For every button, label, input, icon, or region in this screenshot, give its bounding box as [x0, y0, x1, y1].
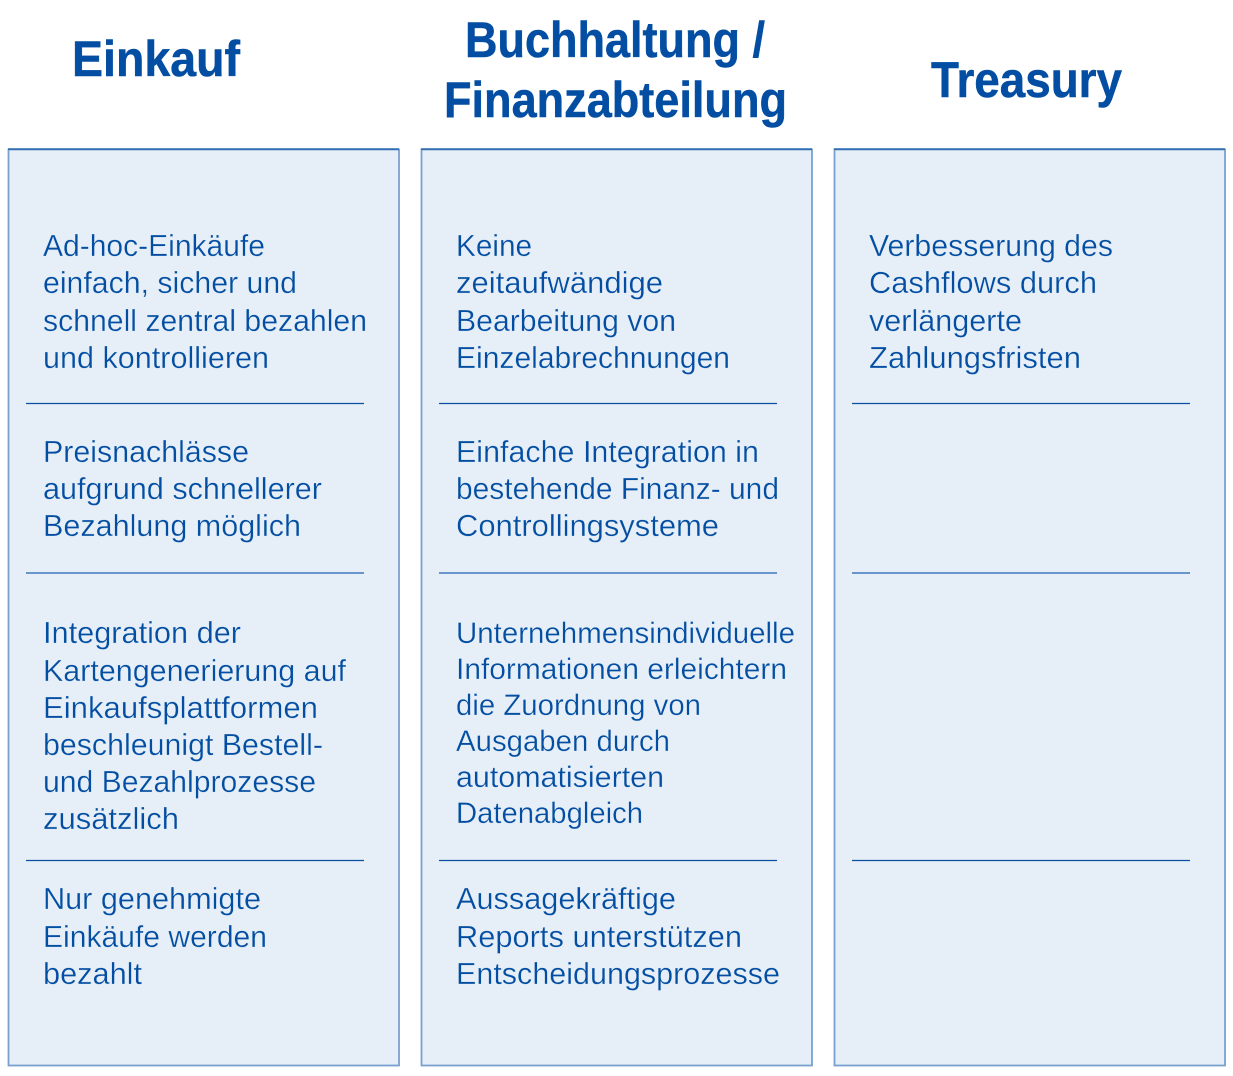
- text: Integration der Kartengenerierung: beschleunigt Bestell-: [43, 727, 323, 762]
- text: Preisnachlässe: aufgrund schnellerer: [43, 471, 322, 506]
- text: Ad-hoc-Einkäufe: und kontrollieren: [43, 340, 269, 375]
- text: Ad-hoc-Einkäufe: schnell zentral bezahlen: [43, 303, 367, 338]
- text: Aussagekräftige Reports: [456, 881, 780, 991]
- text: Keine zeitaufwändige Bearbeitung: [456, 228, 730, 375]
- text: Verbesserung des Cashflows: [869, 228, 1113, 375]
- text: Einfache Integration: Einfache Integration in: [456, 434, 759, 469]
- panel: Treasury: [834, 149, 1225, 1066]
- heading: Einkauf: Einkauf: [72, 31, 240, 87]
- text: Einfache Integration: Controllingsysteme: [456, 508, 719, 543]
- text: Preisnachlässe: [43, 434, 322, 543]
- text: Verbesserung des Cashflows: Cashflows durch: [869, 265, 1097, 300]
- heading: Buchhaltung / Finanzabteilung: Finanzabteilung: [444, 72, 787, 128]
- text: Verbesserung des Cashflows: Zahlungsfristen: [869, 340, 1081, 375]
- text: Integration der Kartengenerierung: und Bezahlprozesse: [43, 764, 316, 799]
- text: Aussagekräftige Reports: Aussagekräftige: [456, 881, 676, 916]
- text: Nur genehmigte Einkäufe: Einkäufe werden: [43, 919, 267, 954]
- text: Keine zeitaufwändige Bearbeitung: Bearbeitung von: [456, 303, 676, 338]
- heading: Buchhaltung / Finanzabteilung: [444, 12, 787, 128]
- text: Unternehmensindividuelle Informationen: die Zuordnung von: [456, 689, 701, 722]
- text: Verbesserung des Cashflows: Verbesserung des: [869, 228, 1113, 263]
- text: Nur genehmigte Einkäufe: bezahlt: [43, 956, 142, 991]
- heading: Buchhaltung / Finanzabteilung: Buchhaltung /: [465, 12, 765, 68]
- text: Nur genehmigte Einkäufe: Nur genehmigte: [43, 881, 261, 916]
- text: Ad-hoc-Einkäufe: einfach, sicher und: [43, 265, 297, 300]
- text: Ad-hoc-Einkäufe: [43, 228, 367, 375]
- text: Unternehmensindividuelle Informationen: Datenabgleich: [456, 797, 643, 830]
- text: Unternehmensindividuelle Informationen: Informationen erleichtern: [456, 653, 787, 686]
- text: Unternehmensindividuelle Informationen: Ausgaben durch: [456, 725, 670, 758]
- text: Verbesserung des Cashflows: verlängerte: [869, 303, 1022, 338]
- text: Integration der Kartengenerierung: Integration der: [43, 615, 241, 650]
- text: Integration der Kartengenerierung: Einkaufsplattformen: [43, 690, 318, 725]
- text: Unternehmensindividuelle Informationen: automatisierten: [456, 761, 664, 794]
- text: Keine zeitaufwändige Bearbeitung: Einzelabrechnungen: [456, 340, 730, 375]
- text: Preisnachlässe: Preisnachlässe: [43, 434, 249, 469]
- panel: Buchhaltung / Finanzabteilung: [421, 149, 812, 1066]
- text: Aussagekräftige Reports: Entscheidungsprozesse: [456, 956, 780, 991]
- heading: Treasury: Treasury: [931, 52, 1122, 108]
- text: Ad-hoc-Einkäufe: Ad-hoc-Einkäufe: [43, 228, 265, 263]
- text: Nur genehmigte Einkäufe: [43, 881, 267, 991]
- text: Aussagekräftige Reports: Reports unterstützen: [456, 919, 742, 954]
- text: Keine zeitaufwändige Bearbeitung: zeitaufwändige: [456, 265, 663, 300]
- text: Unternehmensindividuelle Informationen: Unternehmensindividuelle: [456, 617, 795, 650]
- text: Integration der Kartengenerierung: Kartengenerierung auf: [43, 653, 346, 688]
- panel: Einkauf: [8, 149, 399, 1066]
- text: Unternehmensindividuelle Informationen: [456, 617, 795, 830]
- text: Integration der Kartengenerierung: [43, 615, 346, 836]
- text: Keine zeitaufwändige Bearbeitung: Keine: [456, 228, 532, 263]
- text: Einfache Integration: [456, 434, 779, 543]
- text: Preisnachlässe: Bezahlung möglich: [43, 508, 301, 543]
- text: Einfache Integration: bestehende Finanz- und: [456, 471, 779, 506]
- text: Integration der Kartengenerierung: zusätzlich: [43, 801, 179, 836]
